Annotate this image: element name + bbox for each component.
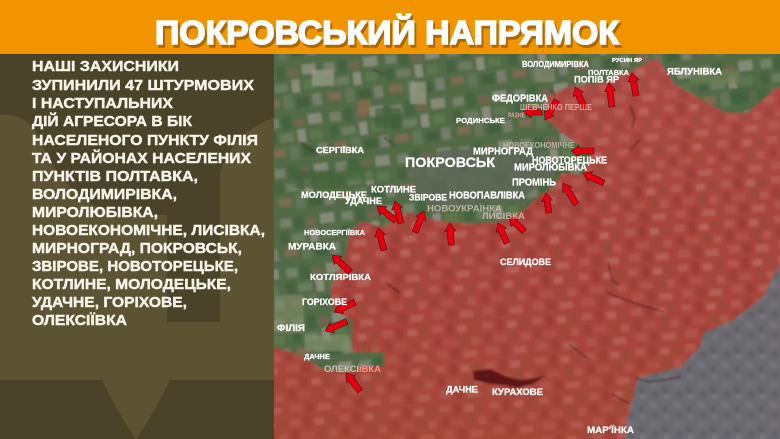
label: Yablunivka: ЯБЛУНІВКА — [667, 66, 722, 78]
arrow: 4 — [540, 97, 562, 123]
arrow: 7 — [581, 168, 606, 188]
text block: summary: КОТЛИНЕ, МОЛОДЕЦЬКЕ, — [32, 276, 231, 293]
arrow: 18 — [332, 297, 357, 317]
arrow: 3 — [627, 72, 641, 97]
panel: satellite map — [268, 48, 780, 439]
text block: summary: УДАЧНЕ, ГОРІХОВЕ, — [32, 294, 187, 311]
arrow: 6 — [571, 146, 594, 156]
map: rivers — [300, 70, 680, 404]
label: Shevchenko Pershe: ШЕВЧЕНКО ПЕРШЕ — [520, 103, 593, 112]
arrow: 16 — [373, 227, 389, 252]
label: Novoekonomichne: НОВОЕКОНОМІЧНЕ — [503, 141, 576, 150]
map labels — [277, 58, 722, 435]
text block: summary: МИРОЛЮБІВКА, — [32, 204, 158, 221]
text block: summary: ДІЙ АГРЕСОРА В БІК — [32, 112, 193, 130]
text block: summary: НАШІ ЗАХИСНИКИ — [32, 58, 179, 75]
label: Filiia: ФІЛІЯ — [277, 323, 305, 333]
arrow: 2 — [604, 82, 617, 107]
map: red tint overlay — [268, 58, 780, 439]
label: Novopavlivka: НОВОПАВЛІВКА — [449, 190, 525, 202]
title: ПОКРОВСЬКИЙ НАПРЯМОК — [157, 16, 622, 54]
label: Novoserhiivka: НОВОСЕРГІЇВКА — [304, 228, 366, 237]
title: ПОКРОВСЬКИЙ НАПРЯМОК — [155, 13, 620, 51]
text block: summary — [32, 58, 265, 329]
arrow: 11 — [493, 221, 512, 245]
text block: summary: ЗУПИНИЛИ 47 ШТУРМОВИХ — [32, 77, 254, 94]
label: Kotlyne: КОТЛИНЕ — [371, 184, 416, 196]
text block: summary: ОЛЕКСІЇВКА — [32, 312, 127, 329]
label: Razne: РАЗНЕ — [508, 112, 525, 120]
text block: summary: ПУНКТІВ ПОЛТАВКА, — [32, 168, 198, 185]
arrow: 19 — [323, 316, 349, 336]
label: Dachne: ДАЧНЕ — [446, 384, 478, 396]
label: Marinka: МАР'ЇНКА — [587, 425, 635, 435]
arrow: 1 — [570, 85, 590, 111]
map: larger field patches — [274, 68, 770, 351]
text block: summary: ВОЛОДИМИРІВКА, — [32, 186, 177, 203]
text block: summary: МИРНОГРАД, ПОКРОВСЬК, — [32, 240, 242, 257]
label: Myroliubivka: МИРОЛЮБІВКА — [514, 162, 587, 174]
icon: trident watermark — [0, 115, 274, 439]
label: Dachne west: ДАЧНЕ — [304, 352, 330, 361]
arrow: 13 — [410, 209, 429, 234]
arrow: 5 — [523, 106, 542, 118]
label: Fedorivka: ФЕДОРІВКА — [492, 94, 548, 104]
label: Poltavka: ПОЛТАВКА — [588, 68, 630, 77]
arrow: 9 — [541, 192, 554, 214]
arrow: 20 — [342, 370, 364, 395]
map: green unoccupied terrain — [274, 54, 780, 374]
label: Novotoretske: НОВОТОРЕЦЬКЕ — [532, 156, 607, 166]
text block: summary: І НАСТУПАЛЬНИХ — [32, 95, 173, 112]
label: Rodynske: РОДИНСЬКЕ — [456, 116, 505, 125]
label: Horikhove: ГОРІХОВЕ — [302, 297, 347, 307]
arrow: 8 — [558, 180, 581, 207]
label: Rusyn Yar: РУСИН ЯР — [612, 58, 642, 64]
label: Kurakhove: КУРАХОВЕ — [492, 387, 543, 397]
map: Pokrovsk urban area — [408, 148, 560, 212]
label: Popiv Yar: ПОПІВ ЯР — [574, 74, 620, 86]
map: Kurakhove reservoir — [473, 369, 545, 388]
arrow: 15 — [374, 202, 399, 225]
text block: summary: НАСЕЛЕНОГО ПУНКТУ ФІЛІЯ — [32, 132, 258, 149]
panel: left text background — [0, 54, 274, 439]
arrow: 14 — [390, 200, 406, 225]
label: Muravka: МУРАВКА — [288, 242, 336, 252]
label: Novoukrainka: НОВОУКРАЇНКА — [427, 204, 502, 214]
label: Volodymyrivka: ВОЛОДИМИРІВКА — [522, 60, 589, 69]
arrows: attack directions — [323, 72, 641, 395]
header bar — [0, 0, 780, 54]
map: red occupied territory — [268, 58, 780, 439]
label: Pokrovsk: ПОКРОВСЬК — [405, 154, 495, 170]
label: Promin: ПРОМІНЬ — [512, 178, 556, 188]
arrow: 12 — [445, 223, 457, 245]
arrow: 17 — [328, 251, 354, 276]
label: Selydove: СЕЛИДОВЕ — [500, 257, 551, 267]
label: Lysivka: ЛИСІВКА — [482, 211, 526, 221]
map: grey urban area at bottom right — [624, 260, 780, 439]
label: Zvirove: ЗВІРОВЕ — [409, 192, 447, 204]
text block: summary: ТА У РАЙОНАХ НАСЕЛЕНИХ — [32, 149, 251, 167]
text block: summary: НОВОЕКОНОМІЧНЕ, ЛИСІВКА, — [32, 222, 265, 239]
label: Oleksiivka: ОЛЕКСІЇВКА — [324, 364, 382, 374]
arrow: 10 — [505, 213, 528, 235]
label: Udachne: УДАЧНЕ — [345, 196, 382, 206]
label: Kotliarivka: КОТЛЯРІВКА — [310, 272, 371, 282]
label: Myrnohrad: МИРНОГРАД — [473, 146, 533, 158]
label: Serhiivka: СЕРГІЇВКА — [316, 145, 364, 155]
label: Molodetske: МОЛОДЕЦЬКЕ — [301, 190, 367, 200]
text block: summary: ЗВІРОВЕ, НОВОТОРЕЦЬКЕ, — [32, 258, 238, 275]
